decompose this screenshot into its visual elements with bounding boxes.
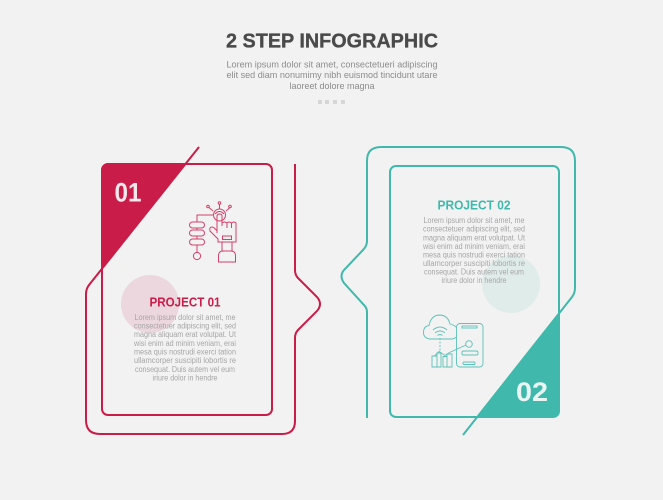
project 01 body text: mesa quis nostrudi exerci tation (134, 348, 236, 356)
project 01 body text (133, 313, 237, 382)
project 02 body text (422, 216, 526, 285)
project 01 body text: Lorem ipsum dolor sit amet, me (134, 313, 236, 322)
subtitle text: elit sed diam nonumimy nibh euismod tincidunt utare (226, 70, 438, 80)
number corner triangle (101, 163, 186, 270)
project 02 body text: Lorem ipsum dolor sit amet, me (424, 216, 524, 225)
project 01 body text: magna aliquam erat volutpat. Ut (134, 330, 237, 339)
panel: project 01 (86, 147, 320, 434)
number corner triangle (477, 312, 560, 418)
panel: project 02 (342, 147, 575, 435)
project 01 body text: consequat. Duis autem vel eum (135, 365, 235, 374)
outer arrow outline (342, 147, 575, 435)
title: 2 STEP INFOGRAPHIC (226, 30, 438, 52)
step number 02: 02 (516, 377, 548, 407)
decorative circle pink (121, 275, 179, 333)
project 01 body text: wisi enim ad minim veniam, erai (133, 339, 236, 348)
project 02 heading: PROJECT 02 (438, 197, 510, 212)
step number 01: 01 (114, 178, 142, 208)
subtitle text: laoreet dolore magna (290, 81, 375, 91)
project 02 body text: wisi enim ad minim veniam, erai (422, 242, 525, 251)
decorative circle teal (482, 255, 540, 313)
project 02 body text: ullamcorper suscipiti lobortis re (423, 259, 525, 268)
pagination dots (318, 100, 345, 104)
project 01 body text: consectetuer adipiscing elit, sed (134, 322, 236, 331)
outer arrow outline (86, 147, 320, 434)
project 02 body text: mesa quis nostrudi exerci tation (423, 250, 525, 260)
project 02 body text: magna aliquam erat volutpat. Ut (423, 234, 526, 242)
project 01 body text: ullamcorper suscipiti lobortis re (134, 356, 236, 365)
subtitle text: Lorem ipsum dolor sit amet, consectetueri adipiscing (226, 60, 438, 70)
icon: cloud and phone (423, 315, 483, 367)
subtitle text (226, 60, 438, 91)
project 01 heading: PROJECT 01 (150, 295, 220, 310)
project 02 body text: consectetuer adipiscing elit, sed (423, 225, 525, 234)
project 02 body text: iriure dolor in hendre (442, 276, 506, 285)
inner card outline (102, 164, 272, 415)
icon: robot hand (190, 202, 236, 262)
inner card outline (390, 166, 559, 417)
project 02 body text: consequat. Duis autem vel eum (424, 268, 524, 276)
project 01 body text: iriure dolor in hendre (152, 374, 218, 382)
